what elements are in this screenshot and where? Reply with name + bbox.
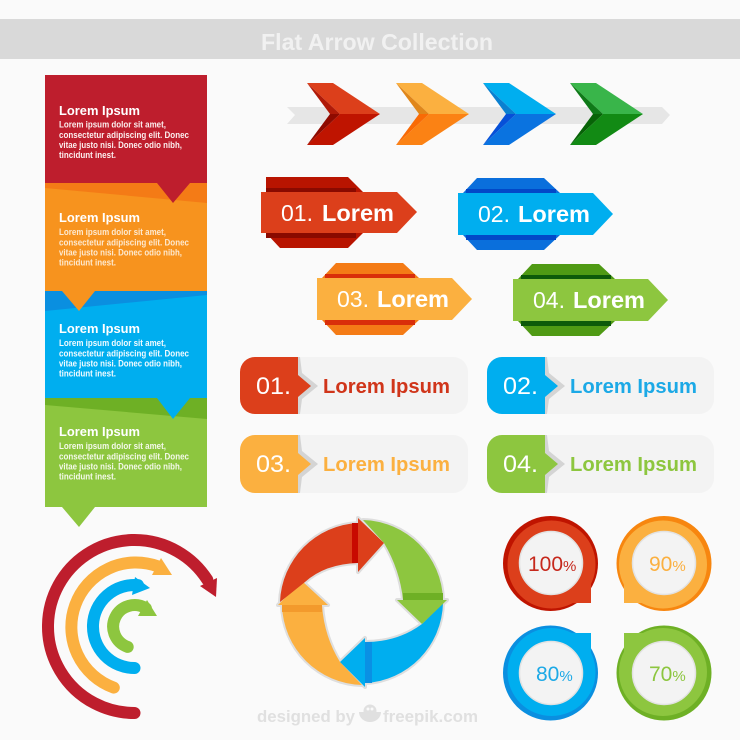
callout: green: vitae justo nisi. Donec odio nibh, [59,462,182,472]
chevron: red [307,83,380,145]
chevron: green [570,83,643,145]
callout: blue: Lorem Ipsum [59,321,140,336]
callout: red: Lorem ipsum dolor sit amet, [59,120,166,130]
badge: 02 Lorem: Lorem [518,201,590,227]
badge: 01 Lorem [261,177,417,248]
callout: red [45,75,207,203]
chevron arrow row [287,83,670,145]
chevron: orange [396,83,469,145]
cycle arrow: red [280,518,384,602]
cycle arrow: green [363,520,447,624]
badge: 01 Lorem: 01. [281,200,313,226]
chevron: blue [483,83,556,145]
badge: 03 Lorem: 03. [337,286,369,312]
callout: green: Lorem Ipsum [59,424,140,439]
callout: red: consectetur adipiscing elit. Donec [59,130,189,141]
callout: blue [45,291,207,419]
percentage dial: 100% [503,516,598,611]
callout: blue: tincidunt inest. [59,368,116,380]
footer credit [257,704,478,726]
pill: 03 Lorem Ipsum: 03. [256,451,291,478]
pill: 01 Lorem Ipsum: Lorem Ipsum [323,376,450,398]
percentage dial: 70% [616,626,712,720]
track bar [287,107,670,124]
percentage dial: 90% [616,516,712,611]
badge: 04 Lorem: 04. [533,287,565,313]
pill: 02 Lorem Ipsum: Lorem Ipsum [570,376,697,398]
icon: freepik mascot [359,704,381,722]
pill: 04 Lorem Ipsum [487,435,714,493]
badge: 03 Lorem: Lorem [377,286,449,312]
callout: blue: vitae justo nisi. Donec odio nibh, [59,358,182,370]
callout: red: Lorem Ipsum [59,103,140,118]
percentage dial: 80% [503,626,598,720]
panel: stacked text callouts [45,75,207,527]
badge: 02 Lorem: 02. [478,201,510,227]
curved arrow: orange [71,558,172,688]
callout: orange: Lorem ipsum dolor sit amet, [59,227,166,238]
circular cycle arrows [278,518,447,687]
pill: 02 Lorem Ipsum [487,357,714,414]
cycle arrow: orange [278,581,362,685]
footer credit: freepik.com [383,707,478,726]
footer credit: designed by [257,707,356,726]
badge: 04 Lorem: Lorem [573,287,645,313]
title bar [0,19,740,59]
curved arrow: green [113,600,157,647]
callout: orange: tincidunt inest. [59,258,116,268]
callout: green: tincidunt inest. [59,472,116,482]
badge: 03 Lorem [317,263,472,335]
callout: orange [45,183,207,311]
curved arrow: blue [93,577,150,668]
callout: orange: vitae justo nisi. Donec odio nibh, [59,248,182,258]
callout: red: tincidunt inest. [59,150,116,161]
percentage dial: 90%: 90% [649,553,686,576]
callout: orange: Lorem Ipsum [59,210,140,225]
concentric curved arrows [48,540,217,713]
cycle outline [278,518,447,687]
callout: orange: consectetur adipiscing elit. Donec [59,238,189,248]
pill: 03 Lorem Ipsum [240,435,468,493]
pill: 04 Lorem Ipsum: Lorem Ipsum [570,454,697,476]
pill: 03 Lorem Ipsum: Lorem Ipsum [323,454,450,476]
pill: 02 Lorem Ipsum: 02. [503,373,538,400]
curved arrow: red [48,540,217,713]
title: Flat Arrow Collection [261,29,493,55]
badge: 04 Lorem [513,264,668,336]
callout: blue: Lorem ipsum dolor sit amet, [59,338,166,349]
callout: green: Lorem ipsum dolor sit amet, [59,441,166,452]
callout: green [45,398,207,527]
pill: 01 Lorem Ipsum [240,357,468,414]
pill: 04 Lorem Ipsum: 04. [503,451,538,478]
callout: red: vitae justo nisi. Donec odio nibh, [59,140,182,151]
pill: 01 Lorem Ipsum: 01. [256,373,291,400]
callout: green: consectetur adipiscing elit. Donec [59,452,189,462]
callout: blue: consectetur adipiscing elit. Donec [59,348,189,360]
percentage dial: 100%: 100% [528,553,576,576]
badge: 02 Lorem [458,178,613,250]
badge: 01 Lorem: Lorem [322,200,394,226]
percentage dial: 70%: 70% [649,663,686,686]
percentage dial: 80%: 80% [536,663,573,686]
cycle arrow: blue [340,603,443,687]
